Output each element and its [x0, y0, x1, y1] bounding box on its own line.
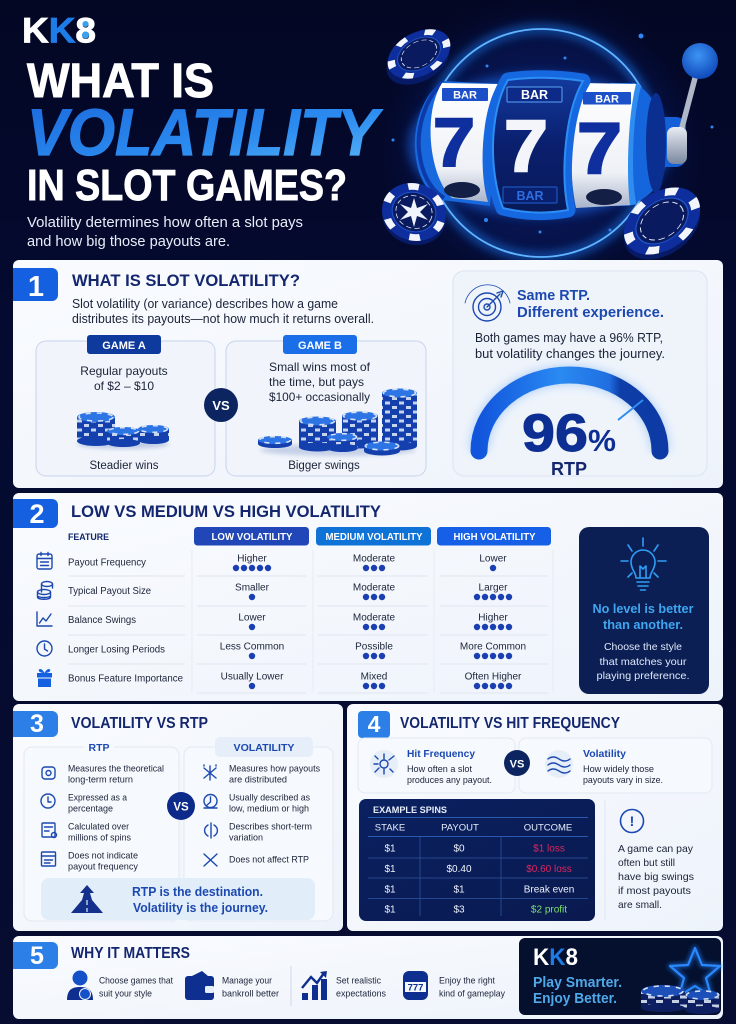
row: balance swings: Moderate: [353, 612, 396, 624]
RTP card: Same RTP.: [517, 287, 590, 304]
table: example spins: EXAMPLE SPINS: [373, 805, 447, 815]
row: bonus feature importance: Usually Lower: [221, 672, 284, 682]
row: payout frequency: Payout Frequency: [68, 558, 146, 568]
row: payout frequency: Higher: [237, 554, 267, 564]
row: longer losing periods: [37, 641, 526, 659]
badge 3: [13, 710, 58, 738]
sevens: 7: [433, 104, 475, 181]
casino chips: [374, 19, 713, 273]
volatility card: payouts vary in size.: [583, 775, 663, 786]
table header: HIGH VOLATILITY: [454, 532, 536, 543]
RTP column: millions of spins: [68, 832, 131, 844]
icon: cross: [204, 854, 217, 866]
row: longer losing periods: Possible: [355, 642, 393, 652]
row: typical payout size: Moderate: [353, 582, 396, 594]
icon: exclamation: !: [630, 813, 634, 829]
volatility column: VOLATILITY: [234, 742, 294, 754]
VS badge: [504, 750, 530, 776]
left reel: [431, 83, 498, 202]
volatility column: low, medium or high: [229, 804, 309, 814]
panel 3: volatility vs RTP: [13, 704, 343, 931]
title: VOLATILITY: [27, 95, 383, 169]
callout: destination and journey: [41, 878, 315, 920]
icon: clock target: [42, 767, 55, 779]
game B card: the time, but pays: [269, 375, 364, 389]
heading 1: WHAT IS SLOT VOLATILITY?: [72, 272, 300, 290]
reel labels: BAR: [595, 94, 619, 106]
benefit: choose games: [67, 970, 173, 1000]
icon: calendar: [42, 852, 56, 866]
icon: timer: [204, 794, 217, 808]
heading 4: VOLATILITY VS HIT FREQUENCY: [400, 715, 621, 732]
banner: play smarter: Enjoy Better.: [533, 991, 617, 1007]
gauge: 96% RTP: RTP: [551, 459, 587, 479]
callout: no level is better: than another.: [603, 618, 683, 632]
reel labels: BAR: [516, 189, 544, 203]
callout: destination and journey: RTP is the destination.: [132, 884, 263, 899]
RTP column: Does not indicate: [68, 850, 138, 862]
icon: nodes: [374, 754, 394, 774]
game A card: GAME A: [102, 340, 146, 352]
banner: play smarter: KK8: [533, 944, 578, 971]
reel labels: BAR: [521, 88, 548, 102]
table: example spins: $3: [453, 904, 465, 916]
icon: split arrow: [205, 823, 217, 838]
row: bonus feature importance: Bonus Feature Importance: [68, 674, 183, 684]
subtitle: [27, 215, 303, 250]
icon: clock: [41, 794, 55, 808]
benefit: choose games: Choose games that: [99, 976, 173, 986]
table: example spins: $1 loss: [533, 844, 565, 854]
badge 4: 4: [368, 711, 381, 737]
volatility column: are distributed: [229, 774, 287, 786]
heading 5: WHY IT MATTERS: [71, 945, 190, 962]
slot machine: 7: [504, 106, 548, 187]
gauge: 96% RTP: %: [588, 423, 616, 458]
callout: no level is better: Choose the style: [604, 641, 682, 653]
table: example spins: $2 profit: [531, 904, 567, 916]
RTP column: percentage: [68, 804, 113, 814]
logo: KK8: KK8: [22, 12, 96, 50]
title: IN SLOT GAMES?: [27, 161, 347, 210]
chips: large stacks: [258, 388, 417, 456]
game B card: [226, 335, 426, 476]
row: balance swings: [37, 612, 512, 630]
gauge: 96% RTP: 96: [522, 404, 588, 463]
RTP column: RTP: [88, 742, 110, 754]
note: payout swings: are small.: [618, 899, 662, 911]
slot machine: 7: [577, 109, 622, 189]
note: payout swings: [605, 800, 694, 920]
note: payout swings: often but still: [618, 857, 675, 869]
badge 3: 3: [30, 710, 44, 738]
intro text: [72, 297, 374, 326]
hit frequency card: How often a slot: [407, 764, 472, 775]
VS badge: VS: [173, 802, 189, 814]
neon ring: [427, 29, 655, 257]
benefit: gameplay: [403, 971, 505, 1000]
RTP column: Expressed as a: [68, 792, 128, 804]
title: WHAT IS: [27, 55, 214, 108]
game B card: $100+ occasionally: [269, 390, 370, 404]
benefit: expectations: expectations: [336, 988, 386, 1000]
game A card: Steadier wins: [89, 460, 159, 472]
chips: small stacks: [77, 412, 169, 449]
RTP column: payout frequency: [68, 862, 138, 872]
row: bonus feature importance: Mixed: [361, 672, 387, 682]
panel 4: volatility vs hit frequency: [347, 704, 723, 931]
subtitle: Volatility determines how often a slot pays: [27, 215, 303, 231]
volatility column: Describes short-term: [229, 822, 312, 832]
icon: road: [71, 885, 103, 913]
benefit: expectations: [302, 971, 386, 1000]
VS badge: [167, 792, 195, 820]
heading 2: LOW VS MEDIUM VS HIGH VOLATILITY: [71, 503, 381, 521]
callout: destination and journey: Volatility is the journey.: [133, 900, 268, 915]
volatility column: variation: [229, 832, 263, 844]
callout: no level is better: playing preference.: [596, 670, 690, 682]
table header: FEATURE: [68, 532, 109, 543]
game A card: Regular payouts: [80, 364, 168, 378]
icon: neon star: [670, 948, 720, 996]
panel 2: low vs medium vs high: [13, 493, 723, 701]
RTP column: [24, 741, 179, 921]
note: payout swings: have big swings: [618, 871, 694, 883]
benefit: gameplay: kind of gameplay: [439, 988, 505, 1000]
right casing: [610, 83, 667, 206]
VS badge: VS: [212, 398, 230, 413]
icon: light bulb: [621, 538, 666, 590]
row: balance swings: Higher: [478, 612, 508, 624]
callout: no level is better: that matches your: [600, 656, 687, 668]
game B card: GAME B: [298, 340, 342, 352]
benefit: bankroll: [185, 971, 279, 1000]
badge 1: [13, 268, 58, 303]
row: typical payout size: Larger: [479, 582, 508, 594]
row: payout frequency: [37, 552, 507, 571]
volatility column: Measures how payouts: [229, 764, 320, 774]
RTP card: but volatility changes the journey.: [475, 347, 665, 361]
middle reel: [493, 78, 583, 213]
badge 4: [358, 711, 390, 738]
icon: waves: [548, 757, 570, 773]
reel labels: BAR: [453, 90, 477, 102]
panel 1: what is slot volatility: [13, 260, 723, 488]
VS badge: VS: [510, 758, 524, 770]
note: payout swings: if most payouts: [618, 885, 691, 897]
hit frequency card: [358, 738, 515, 793]
badge 2: 2: [29, 499, 45, 529]
icon: target: [465, 285, 510, 321]
badge 1: 1: [28, 271, 44, 303]
game B card: Bigger swings: [288, 460, 360, 472]
badge 5: [13, 942, 58, 970]
callout: no level is better: [579, 527, 709, 694]
RTP card: Different experience.: [517, 304, 664, 321]
volatility card: Volatility: [583, 748, 626, 760]
table header: MEDIUM VOLATILITY: [326, 532, 423, 543]
VS badge: [204, 388, 238, 422]
chips: banner stacks: [641, 985, 720, 1014]
game A card: [36, 335, 215, 476]
game A card: of $2 – $10: [94, 379, 154, 393]
row: bonus feature importance: Often Higher: [465, 672, 522, 682]
volatility card: How widely those: [583, 764, 654, 775]
benefit: gameplay: Enjoy the right: [439, 976, 495, 986]
table: example spins: $1: [384, 904, 396, 916]
badge 2: [13, 499, 58, 529]
hit frequency card: Hit Frequency: [407, 748, 475, 760]
row: balance swings: Balance Swings: [68, 615, 136, 626]
benefit: choose games: suit your style: [99, 988, 152, 1000]
reel labels: [442, 87, 631, 203]
benefit: bankroll: bankroll better: [222, 988, 279, 1000]
row: bonus feature importance: [37, 669, 522, 689]
title: [27, 55, 383, 210]
volatility column: [184, 737, 333, 921]
lever: [680, 78, 695, 135]
table: example spins: Break even: [524, 884, 574, 896]
table header: [68, 527, 551, 546]
table: example spins: [359, 799, 595, 921]
row: longer losing periods: Longer Losing Periods: [68, 644, 165, 656]
table: example spins: PAYOUT: [441, 822, 479, 834]
table: example spins: $1: [453, 884, 465, 896]
RTP column: Measures the theoretical: [68, 764, 164, 774]
table: example spins: $0.40: [446, 864, 472, 875]
intro text: distributes its payouts—not how much it returns overall.: [72, 312, 374, 326]
row: balance swings: Lower: [238, 612, 266, 624]
slot machine: [408, 43, 718, 217]
left casing: [415, 81, 500, 206]
axle: [653, 117, 686, 167]
game B card: Small wins most of: [269, 360, 371, 374]
RTP card: Both games may have a 96% RTP,: [475, 331, 663, 345]
row: typical payout size: Smaller: [235, 582, 270, 594]
RTP column: long-term return: [68, 774, 133, 786]
table: example spins: $0.60 loss: [526, 864, 572, 875]
table grid: [68, 550, 553, 693]
table: example spins: $1: [384, 864, 396, 875]
benefit: expectations: Set realistic: [336, 976, 381, 986]
volatility card: [519, 738, 712, 793]
RTP column: Calculated over: [68, 822, 129, 832]
table: example spins: $0: [453, 844, 465, 854]
table: example spins: $1: [384, 844, 396, 854]
row: payout frequency: Lower: [479, 554, 507, 564]
table: example spins: OUTCOME: [524, 822, 572, 834]
table: example spins: STAKE: [375, 822, 405, 834]
callout: no level is better: No level is better: [592, 602, 694, 616]
icon: calculator: [42, 823, 56, 838]
intro text: Slot volatility (or variance) describes how a game: [72, 297, 338, 311]
row: typical payout size: Typical Payout Size: [68, 586, 151, 597]
row: longer losing periods: More Common: [460, 642, 526, 652]
note: payout swings: A game can pay: [618, 843, 694, 855]
panel 5: why it matters: [13, 936, 723, 1019]
icon: burst: [204, 765, 216, 780]
volatility column: Usually described as: [229, 792, 310, 804]
benefit: gameplay: 777: [408, 982, 423, 994]
table header: LOW VOLATILITY: [212, 532, 293, 543]
table: example spins: $1: [384, 884, 396, 896]
RTP card: [453, 271, 707, 479]
gauge: 96% RTP: [479, 375, 660, 479]
subtitle: and how big those payouts are.: [27, 234, 230, 250]
right reel: [571, 83, 636, 208]
heading 3: VOLATILITY VS RTP: [71, 715, 208, 732]
badge 5: 5: [30, 942, 44, 970]
hero illustration: glowing ring and slot machine: [371, 0, 718, 293]
hit frequency card: produces any payout.: [407, 775, 492, 786]
banner: play smarter: [519, 938, 721, 1015]
banner: play smarter: Play Smarter.: [533, 975, 622, 991]
volatility column: Does not affect RTP: [229, 854, 309, 866]
row: payout frequency: Moderate: [353, 554, 396, 564]
benefit: bankroll: Manage your: [222, 976, 272, 986]
row: longer losing periods: Less Common: [220, 642, 284, 652]
sparkles: [392, 34, 714, 234]
row: typical payout size: [38, 582, 512, 600]
